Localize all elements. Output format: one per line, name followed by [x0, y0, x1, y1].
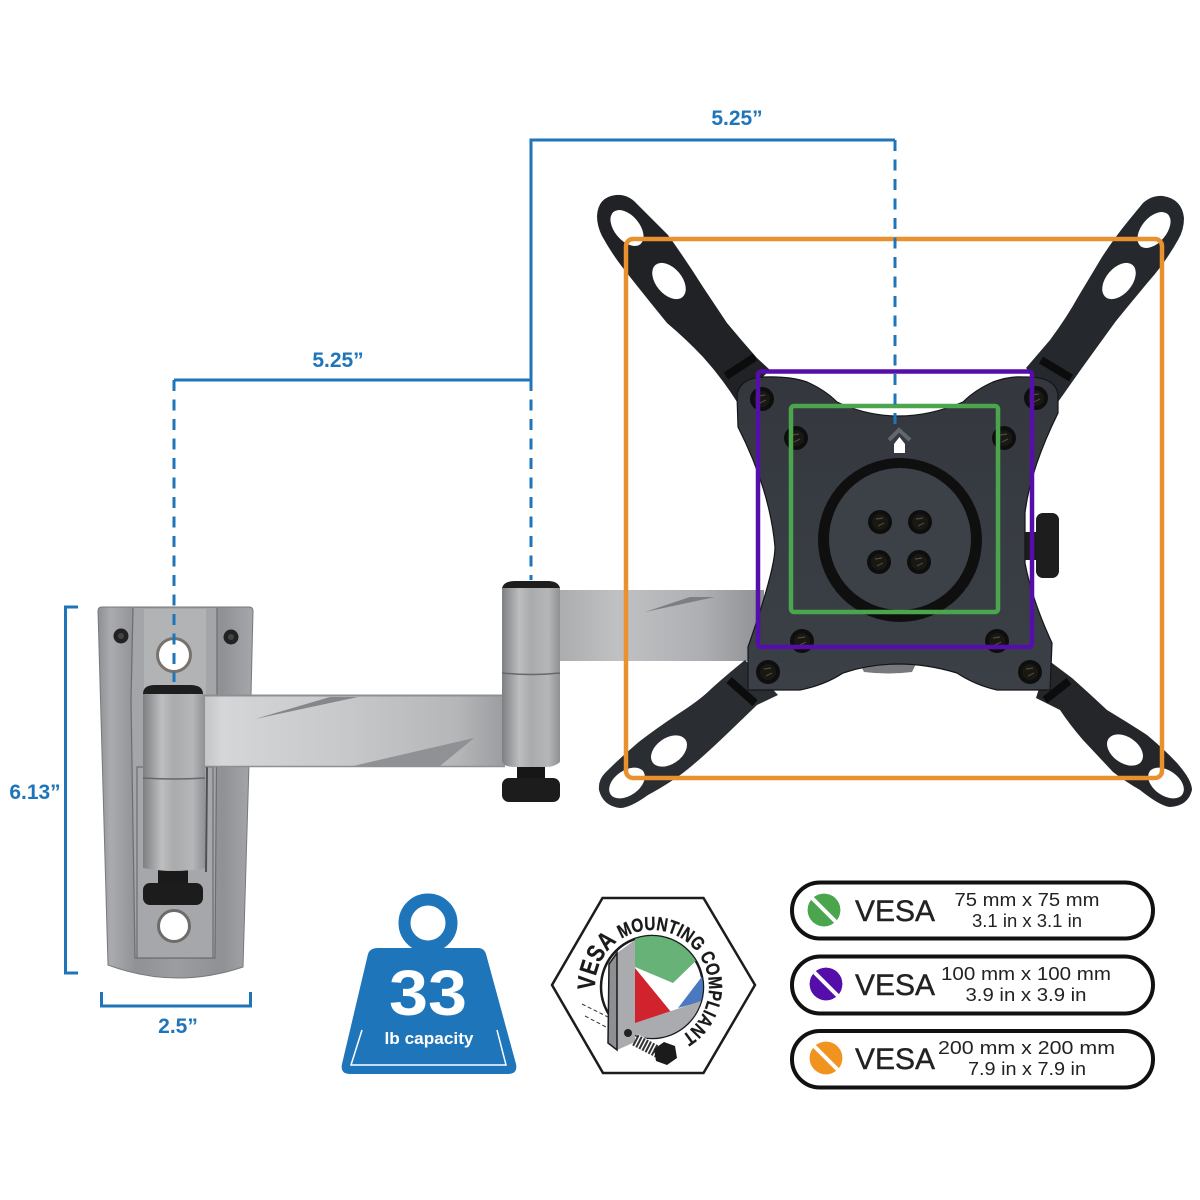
dimension: width 2.5 in — [102, 992, 250, 1038]
tilt knob — [1023, 513, 1059, 578]
spec pill: VESA 200: 200 mm x 200 mm — [938, 1038, 1115, 1058]
top-right bracket leg — [1026, 196, 1184, 402]
weight capacity icon — [342, 900, 516, 1074]
VESA compliant badge — [550, 896, 756, 1074]
badge colour wedges — [635, 936, 703, 1038]
second arm streak — [645, 597, 715, 612]
dimension: height 6.13 in: 6.13” — [9, 781, 61, 804]
lower knob — [143, 868, 203, 905]
spec pill: VESA 75: 3.1 in x 3.1 in — [972, 911, 1082, 931]
spec pill: VESA 100: 100 mm x 100 mm — [941, 964, 1111, 984]
spec pill: VESA 75 — [792, 882, 1153, 938]
dimension: top 5.25 in — [531, 107, 895, 580]
top-left bracket leg — [597, 195, 770, 402]
spec pill: VESA 100 — [792, 956, 1153, 1014]
dimension: height 6.13 in — [9, 607, 78, 973]
VESA bracket — [597, 195, 1192, 808]
dimension: top 5.25 in: 5.25” — [711, 107, 763, 130]
second arm — [555, 590, 764, 661]
spec pill: VESA 100: VESA — [855, 969, 935, 1002]
spec pill: VESA 75: 75 mm x 75 mm — [954, 890, 1100, 910]
spec pill: VESA 75: VESA — [855, 895, 935, 928]
up arrow marker — [889, 430, 910, 453]
green screw icon — [808, 894, 840, 926]
first arm — [190, 695, 505, 767]
badge bracket — [582, 940, 677, 1065]
VESA 100 x 100 outline — [758, 372, 1032, 647]
spec pill: VESA 200 — [792, 1031, 1153, 1088]
central ring — [818, 458, 982, 622]
orange screw icon — [810, 1042, 842, 1074]
bottom-right bracket leg — [1036, 660, 1192, 807]
weight capacity icon: 33 — [389, 957, 467, 1029]
spec pill: VESA 200: 7.9 in x 7.9 in — [968, 1059, 1086, 1079]
bottom-left bracket leg — [599, 660, 778, 808]
right column with cap and knob — [502, 581, 560, 802]
silver pivot below plate — [860, 664, 916, 674]
wall plate — [98, 607, 253, 978]
VESA 75 x 75 outline — [791, 406, 998, 612]
plate screws — [750, 386, 1048, 684]
left column with cap — [143, 685, 205, 871]
dimension: middle 5.25 in: 5.25” — [312, 349, 364, 372]
spec pill: VESA 100: 3.9 in x 3.9 in — [966, 985, 1086, 1005]
wall mount arm photo — [98, 581, 764, 978]
spec pill: VESA 200: VESA — [855, 1043, 935, 1076]
VESA 200 x 200 outline — [626, 239, 1162, 778]
mounting plate — [737, 377, 1058, 690]
dimension: width 2.5 in: 2.5” — [158, 1015, 198, 1038]
weight capacity icon: lb capacity — [384, 1029, 474, 1048]
VESA compliant badge: VESA MOUNTING COMPLIANT — [577, 916, 722, 1047]
purple screw icon — [810, 968, 842, 1000]
